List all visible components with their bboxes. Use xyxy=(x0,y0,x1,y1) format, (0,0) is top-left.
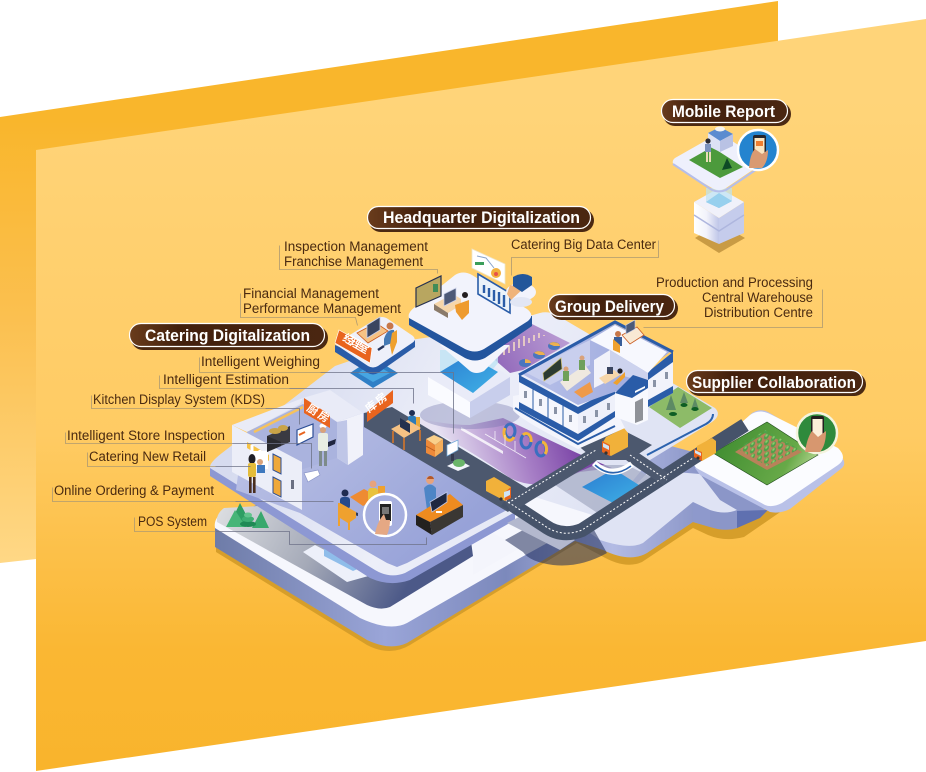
background band: back xyxy=(0,1,778,563)
road shadow overlay xyxy=(505,500,607,566)
platform base xyxy=(513,380,625,449)
gray strip xyxy=(507,515,575,550)
plaza ground xyxy=(552,465,657,516)
line: Online Ordering on floor xyxy=(236,500,334,502)
person xyxy=(705,138,711,162)
truck: parking xyxy=(602,428,628,456)
far bands xyxy=(648,352,673,407)
line: KDS xyxy=(92,396,266,408)
crops xyxy=(738,430,799,466)
platform: supplier farm xyxy=(694,410,844,513)
pillar xyxy=(337,413,363,465)
line: KDS on floor xyxy=(266,408,300,424)
packing tables xyxy=(560,356,593,398)
icon: scan phone circle xyxy=(364,494,406,536)
label: Intelligent Estimation: Intelligent Estimation xyxy=(163,372,289,387)
KDS screen xyxy=(297,424,313,445)
building left wall xyxy=(519,375,578,440)
icon: trees xyxy=(226,503,269,528)
label: Production and Processing: Production and Processing xyxy=(656,275,813,290)
scale device xyxy=(291,470,320,489)
blue floor xyxy=(236,413,507,567)
pillar shade xyxy=(337,420,348,465)
building left wall bands xyxy=(519,375,578,441)
partition shade xyxy=(610,350,648,383)
label: Inspection Management: Inspection Management xyxy=(284,239,428,254)
clerk xyxy=(408,410,420,430)
truck: farm road xyxy=(694,438,716,461)
right white deck xyxy=(473,533,520,575)
partition wall xyxy=(594,350,610,388)
monitor xyxy=(367,317,380,338)
heading pill: Mobile Report xyxy=(662,100,791,126)
heading pill: Headquarter Digitalization: Headquarter Digitalization xyxy=(383,209,580,227)
farm platform top xyxy=(694,412,843,506)
sign: warehouse xyxy=(362,390,393,422)
shadow xyxy=(420,401,520,429)
label: Kitchen Display System: Kitchen Display System (KDS) xyxy=(93,392,265,407)
phone circle xyxy=(738,130,778,170)
platform: manager office xyxy=(335,317,415,374)
icon: ring charts xyxy=(504,424,547,456)
purple analytics zones xyxy=(396,323,612,485)
monitor and plant xyxy=(447,440,470,471)
label: Performance Management: Performance Management xyxy=(243,301,401,316)
line: Production xyxy=(644,290,822,328)
HQ pedestal xyxy=(420,350,520,429)
line: New Retail xyxy=(88,452,216,466)
axis chart xyxy=(485,431,526,458)
line: New Retail on floor xyxy=(216,466,250,468)
top xyxy=(335,317,415,368)
label: Catering Big Data Center: Catering Big Data Center xyxy=(511,237,656,252)
line: POS on floor xyxy=(216,532,426,544)
curved arcs xyxy=(594,463,632,472)
line: Weighing on floor xyxy=(320,372,454,434)
green field xyxy=(713,422,818,485)
chef figure xyxy=(318,424,336,466)
icon: bar chart xyxy=(504,333,544,355)
building left dividers xyxy=(533,388,563,428)
chalkboard xyxy=(543,358,562,381)
line: Financial Performance xyxy=(240,294,358,326)
front bands xyxy=(578,388,615,441)
road dashes xyxy=(505,450,693,533)
building left windows xyxy=(524,391,572,422)
cube top xyxy=(428,350,510,402)
roof interior floor xyxy=(522,324,670,405)
truck: floor xyxy=(486,477,511,501)
inner office xyxy=(599,367,625,385)
blue pad xyxy=(706,193,732,208)
curved blue arc xyxy=(595,465,631,473)
desk xyxy=(391,418,421,450)
room back wall xyxy=(247,404,337,490)
icon: storefront awning xyxy=(247,442,269,469)
platform: headquarters xyxy=(409,249,536,373)
road segment: loop xyxy=(505,425,745,533)
pedestal: manager office xyxy=(350,358,398,388)
rim xyxy=(409,316,532,360)
parking area xyxy=(575,425,652,460)
recessed pit xyxy=(217,498,473,609)
heading pill: Supplier Collaboration xyxy=(686,370,866,396)
far windows xyxy=(653,372,668,387)
stove xyxy=(267,425,290,452)
HQ purple panel xyxy=(487,323,570,373)
desk xyxy=(357,323,388,343)
line: Intelligent Weighing xyxy=(200,358,320,372)
mid platform vertical notch xyxy=(693,502,710,527)
orange cabinet xyxy=(426,435,443,457)
line: POS xyxy=(134,518,216,532)
line: Big Data xyxy=(512,240,658,276)
line: Online Ordering xyxy=(52,488,236,502)
sign: warehouse: 库 房 xyxy=(362,390,390,415)
front wall xyxy=(232,425,302,510)
man xyxy=(340,490,358,516)
label: Central Warehouse: Central Warehouse xyxy=(702,290,813,305)
seated worker xyxy=(455,292,469,320)
line: Store Inspection xyxy=(66,432,232,444)
line: Store Inspection on floor xyxy=(232,444,312,468)
side xyxy=(335,340,415,374)
sign: manager office: 经理室 xyxy=(340,330,372,357)
room back wall top xyxy=(232,390,363,432)
back wall xyxy=(525,340,590,385)
tree xyxy=(722,158,732,170)
table xyxy=(350,489,378,506)
isometric platform base xyxy=(215,400,802,651)
floor rim xyxy=(210,440,515,583)
white room xyxy=(590,325,667,373)
far right wall xyxy=(648,352,673,407)
cashier xyxy=(424,476,436,510)
farm platform rim xyxy=(695,410,844,513)
blue trim strip xyxy=(647,414,713,455)
heading pill: Headquarter Digitalization xyxy=(368,206,594,232)
top xyxy=(409,272,531,352)
windows xyxy=(273,454,281,497)
customer figure xyxy=(248,454,265,493)
fountain pool xyxy=(582,473,642,503)
platform: group delivery xyxy=(513,320,712,449)
light pillar xyxy=(440,350,498,393)
cube front xyxy=(428,377,470,418)
warehouse desk and clerk xyxy=(391,410,470,471)
trucks xyxy=(486,428,716,501)
cube xyxy=(694,188,744,244)
road segment: floor xyxy=(364,407,530,512)
road segment: branch xyxy=(508,452,598,507)
building front wall xyxy=(578,388,615,440)
line: Intelligent Estimation xyxy=(160,376,290,388)
icon: farm phone circle xyxy=(797,413,837,453)
lawn xyxy=(689,147,743,178)
platform: main floor xyxy=(210,312,718,583)
base top surface xyxy=(215,490,580,627)
leader lines over the illustration xyxy=(52,240,822,544)
cube right xyxy=(470,377,510,418)
heading pill: Catering Digitalization xyxy=(130,324,328,350)
reception desk and cashier xyxy=(416,476,463,535)
icon: pool in pit xyxy=(303,545,372,582)
road segment: link xyxy=(630,455,667,480)
diners table xyxy=(338,480,385,530)
desk xyxy=(434,288,466,318)
fountain arches xyxy=(594,463,632,473)
heading pill: Mobile Report: Mobile Report xyxy=(672,103,775,121)
desk xyxy=(416,492,463,535)
platform blue line xyxy=(515,408,615,444)
data board top xyxy=(472,249,505,284)
soil bed xyxy=(735,433,802,470)
cube shadow xyxy=(695,223,745,253)
heading pill: Group Delivery: Group Delivery xyxy=(555,298,665,316)
label: Financial Management: Financial Management xyxy=(243,286,379,301)
roads xyxy=(364,407,745,533)
farm underside shade xyxy=(737,510,768,528)
label: Intelligent Store Inspection: Intelligent Store Inspection xyxy=(67,428,225,443)
chair xyxy=(338,503,356,530)
floor top surface xyxy=(210,312,718,575)
line: Inspection Franchise xyxy=(280,246,438,274)
vestibule xyxy=(615,375,648,425)
bar board xyxy=(478,274,510,313)
heading pill: Group Delivery xyxy=(548,294,678,320)
base side wall xyxy=(215,400,765,646)
lower rim xyxy=(440,345,510,373)
top office xyxy=(613,320,644,353)
purple wedge and data floor xyxy=(396,413,612,485)
label: Franchise Management: Franchise Management xyxy=(284,254,423,269)
mobile report module xyxy=(673,126,778,253)
manager xyxy=(378,322,397,355)
label: Distribution Centre: Distribution Centre xyxy=(704,305,813,320)
orange stripe xyxy=(254,407,303,432)
fountain plaza xyxy=(552,465,657,516)
label: Catering New Retail: Catering New Retail xyxy=(89,449,206,464)
roof outline xyxy=(519,322,673,375)
label: POS System: POS System xyxy=(138,514,207,529)
front windows xyxy=(583,403,610,423)
small building xyxy=(708,126,733,152)
sign: kitchen: 厨 房 xyxy=(304,401,332,425)
top platform xyxy=(673,136,760,190)
blue pad xyxy=(440,355,498,393)
kitchen room xyxy=(232,390,363,510)
big data icon xyxy=(506,274,536,307)
lawn xyxy=(649,387,712,428)
wall screen xyxy=(416,276,441,307)
mid platform top surface xyxy=(590,470,737,546)
heading pill: Catering Digitalization: Catering Digitalization xyxy=(145,327,310,345)
lower white deck xyxy=(523,497,602,533)
light beam xyxy=(706,188,732,208)
platform rim xyxy=(673,164,760,192)
platform shadow xyxy=(216,420,802,651)
icon: pie charts xyxy=(519,342,560,367)
heading pill: Supplier Collaboration: Supplier Collaboration xyxy=(692,374,856,392)
label: Online Ordering and Payment: Online Ordering & Payment xyxy=(54,483,214,498)
line: Estimation on floor xyxy=(290,388,414,404)
data caption bar xyxy=(461,427,503,454)
label: Intelligent Weighing: Intelligent Weighing xyxy=(201,354,320,369)
woman xyxy=(368,480,385,502)
